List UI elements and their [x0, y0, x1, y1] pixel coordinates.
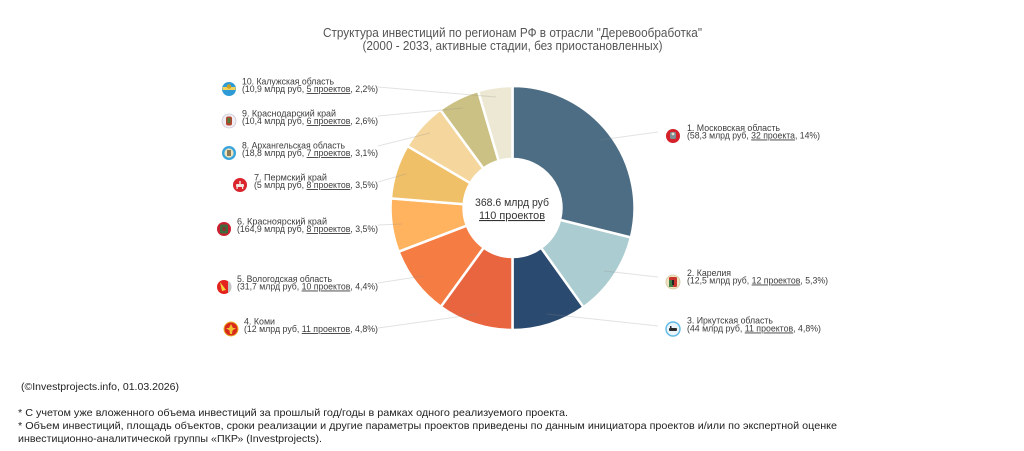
slice 8: Архангельская область: [407, 110, 484, 183]
title: Структура инвестиций по регионам РФ в отрасли "Деревообработка": [323, 25, 702, 40]
icon: Moscow oblast emblem: [666, 129, 680, 143]
icon: Krasnodar emblem: [222, 114, 236, 128]
label: Краснодарский край: [222, 108, 378, 128]
label: Московская область: [666, 123, 820, 143]
icon: Perm emblem: [233, 178, 247, 192]
icon: Komi emblem: [224, 322, 238, 336]
slice 7: Пермский край: [391, 146, 470, 204]
donut centre total: [475, 197, 549, 222]
slice 1: Московская область: [512, 86, 635, 238]
icon: Arkhangelsk emblem: [222, 146, 236, 160]
label: Пермский край: (5 млрд руб, 8 проектов, 3,5%): [254, 180, 378, 190]
label: Карелия: [666, 268, 828, 289]
label: Иркутская область: 3. Иркутская область: [687, 316, 773, 326]
slice 10: Калужская область: [478, 86, 512, 161]
footnotes: * С учетом уже вложенного объема инвестиций за прошлый год/годы в рамках одного реализуемого проекта.: [18, 407, 568, 419]
footnotes: инвестиционно-аналитической группы «ПКР» (Investprojects).: [18, 433, 322, 445]
label: Вологодская область: [217, 274, 378, 294]
icon: Krasnoyarsk emblem: [217, 222, 231, 236]
label: Красноярский край: 6. Красноярский край: [237, 216, 327, 226]
donut centre total: 110 проектов: [479, 210, 545, 222]
label: Краснодарский край: (10,4 млрд руб, 6 проектов, 2,6%): [242, 116, 378, 126]
leader lines: [378, 87, 658, 328]
label: Красноярский край: (164,9 млрд руб, 8 проектов, 3,5%): [237, 224, 378, 234]
label: Иркутская область: (44 млрд руб, 11 проектов, 4,8%): [687, 324, 821, 334]
slice 5: Вологодская область: [399, 226, 484, 307]
slice 4: Коми: [441, 248, 512, 330]
icon: Irkutsk emblem: [666, 322, 680, 336]
label: Калужская область: (10,9 млрд руб, 5 проектов, 2,2%): [242, 84, 378, 94]
label: Пермский край: [233, 172, 378, 192]
label: Красноярский край: [217, 216, 378, 236]
label: Коми: (12 млрд руб, 11 проектов, 4,8%): [244, 324, 378, 334]
label: Пермский край: 7. Пермский край: [254, 172, 327, 182]
label: Калужская область: 10. Калужская область: [242, 76, 334, 86]
label: Калужская область: [222, 76, 378, 96]
label: Архангельская область: 8. Архангельская область: [242, 140, 345, 150]
title: (2000 - 2033, активные стадии, без приостановленных): [362, 38, 662, 53]
label: Коми: [224, 316, 378, 336]
slice 9: Краснодарский край: [440, 91, 499, 168]
label: Иркутская область: [666, 316, 821, 336]
footnotes: * Объем инвестиций, площадь объектов, сроки реализации и другие параметры проектов приведены по данным инициатора проектов и/или по экспертной оценке: [18, 420, 837, 432]
label: Вологодская область: (31,7 млрд руб, 10 проектов, 4,4%): [237, 282, 378, 292]
label: Карелия: 2. Карелия: [687, 268, 731, 278]
icon: Kaluga emblem: [222, 82, 236, 96]
source note: (©Investprojects.info, 01.03.2026): [21, 381, 179, 393]
slice 2: Карелия: [541, 220, 631, 307]
label: Вологодская область: 5. Вологодская область: [237, 274, 332, 284]
label: Московская область: 1. Московская область: [687, 123, 780, 133]
slice 6: Красноярский край: [391, 198, 467, 252]
label: Коми: 4. Коми: [244, 316, 275, 326]
label: Карелия: (12,5 млрд руб, 12 проектов, 5,3%): [687, 276, 828, 286]
label: Архангельская область: (18,8 млрд руб, 7 проектов, 3,1%): [242, 148, 378, 158]
donut centre total: 368.6 млрд руб: [475, 197, 549, 209]
icon: Vologda emblem: [217, 280, 232, 294]
slice 3: Иркутская область: [512, 248, 584, 330]
title: [323, 25, 702, 53]
label: Архангельская область: [222, 140, 378, 160]
footnotes: [18, 407, 837, 445]
label: Московская область: (58,3 млрд руб, 32 проекта, 14%): [687, 130, 820, 140]
donut chart: [391, 86, 635, 330]
label: Краснодарский край: 9. Краснодарский край: [242, 108, 336, 118]
icon: Karelia emblem: [666, 275, 680, 289]
